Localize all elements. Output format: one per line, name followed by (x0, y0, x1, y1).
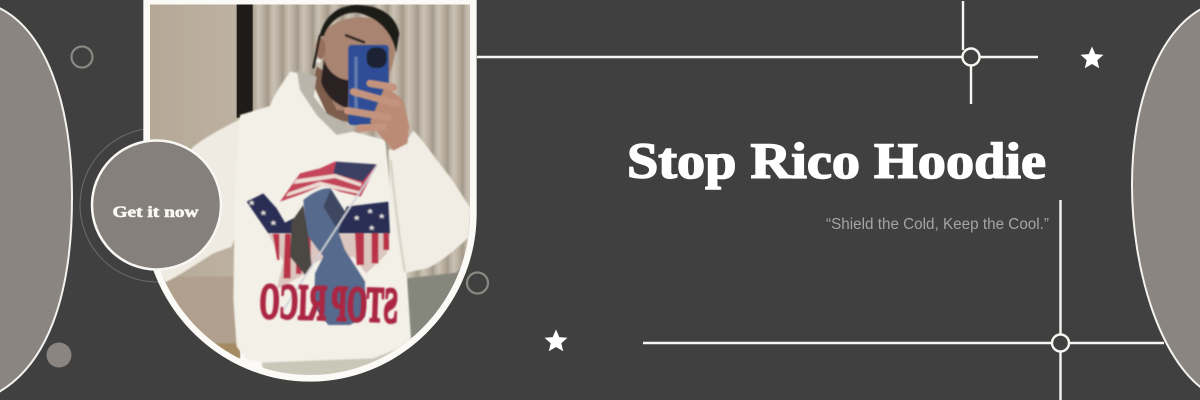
door strip (237, 4, 253, 118)
flag (280, 162, 377, 202)
sleeve crease (391, 160, 405, 272)
hair (319, 5, 399, 53)
curtain (253, 4, 473, 284)
beard (321, 59, 349, 108)
flag canton (333, 162, 377, 182)
hand (347, 83, 409, 151)
small outline circle by photo (467, 272, 488, 294)
bottom connector lines (643, 200, 1164, 400)
red stripe lines (273, 233, 389, 278)
wall (150, 4, 240, 378)
phone (348, 45, 389, 125)
neck (314, 66, 350, 123)
hoodie right sleeve (388, 131, 471, 273)
stars (249, 200, 385, 230)
map navy band left (246, 192, 295, 234)
map stripes (268, 234, 390, 289)
hoodie body (233, 72, 412, 365)
hoodie left arm (147, 112, 253, 283)
photo white border (143, 0, 477, 382)
palm (370, 86, 409, 151)
hood inner collar (297, 71, 353, 135)
get it now button (92, 140, 221, 270)
photo contents (147, 4, 473, 378)
head (310, 5, 399, 123)
right blob shape (1132, 8, 1200, 389)
braid (313, 35, 320, 68)
eagle shadow (323, 189, 345, 228)
title: Stop Rico Hoodie (627, 134, 1046, 190)
filled circle bottom left (46, 342, 72, 368)
photo frame with hoodie model (143, 0, 477, 382)
flag white stripes (286, 174, 362, 197)
lower wall shade (163, 276, 236, 344)
eyebrow (345, 35, 365, 43)
hoodie (147, 71, 471, 365)
star top right (1081, 46, 1104, 68)
earring (317, 59, 321, 63)
star bottom (544, 330, 568, 351)
sofa (400, 266, 461, 347)
phone camera (367, 47, 387, 68)
eagle (303, 188, 365, 325)
tagline: “Shield the Cold, Keep the Cool.” (826, 216, 1049, 233)
left dark figure detail (290, 205, 312, 275)
small outline circle top left (72, 46, 92, 68)
button circle (92, 140, 221, 270)
skin of face (323, 17, 395, 113)
thin ring behind button (80, 128, 234, 282)
map navy band right (337, 202, 390, 233)
left blob shape (0, 7, 72, 393)
button label: Get it now (112, 204, 199, 221)
flag pole (283, 165, 377, 310)
phone sheen (354, 57, 358, 113)
hoodie print (247, 162, 390, 325)
mirrored STOP RICO print: STOP RICO (259, 272, 399, 333)
floor band (214, 342, 241, 359)
ear (316, 38, 326, 59)
fingers (347, 83, 397, 128)
top connector lines (477, 1, 1038, 104)
pants (261, 348, 398, 375)
phone body (348, 45, 389, 125)
